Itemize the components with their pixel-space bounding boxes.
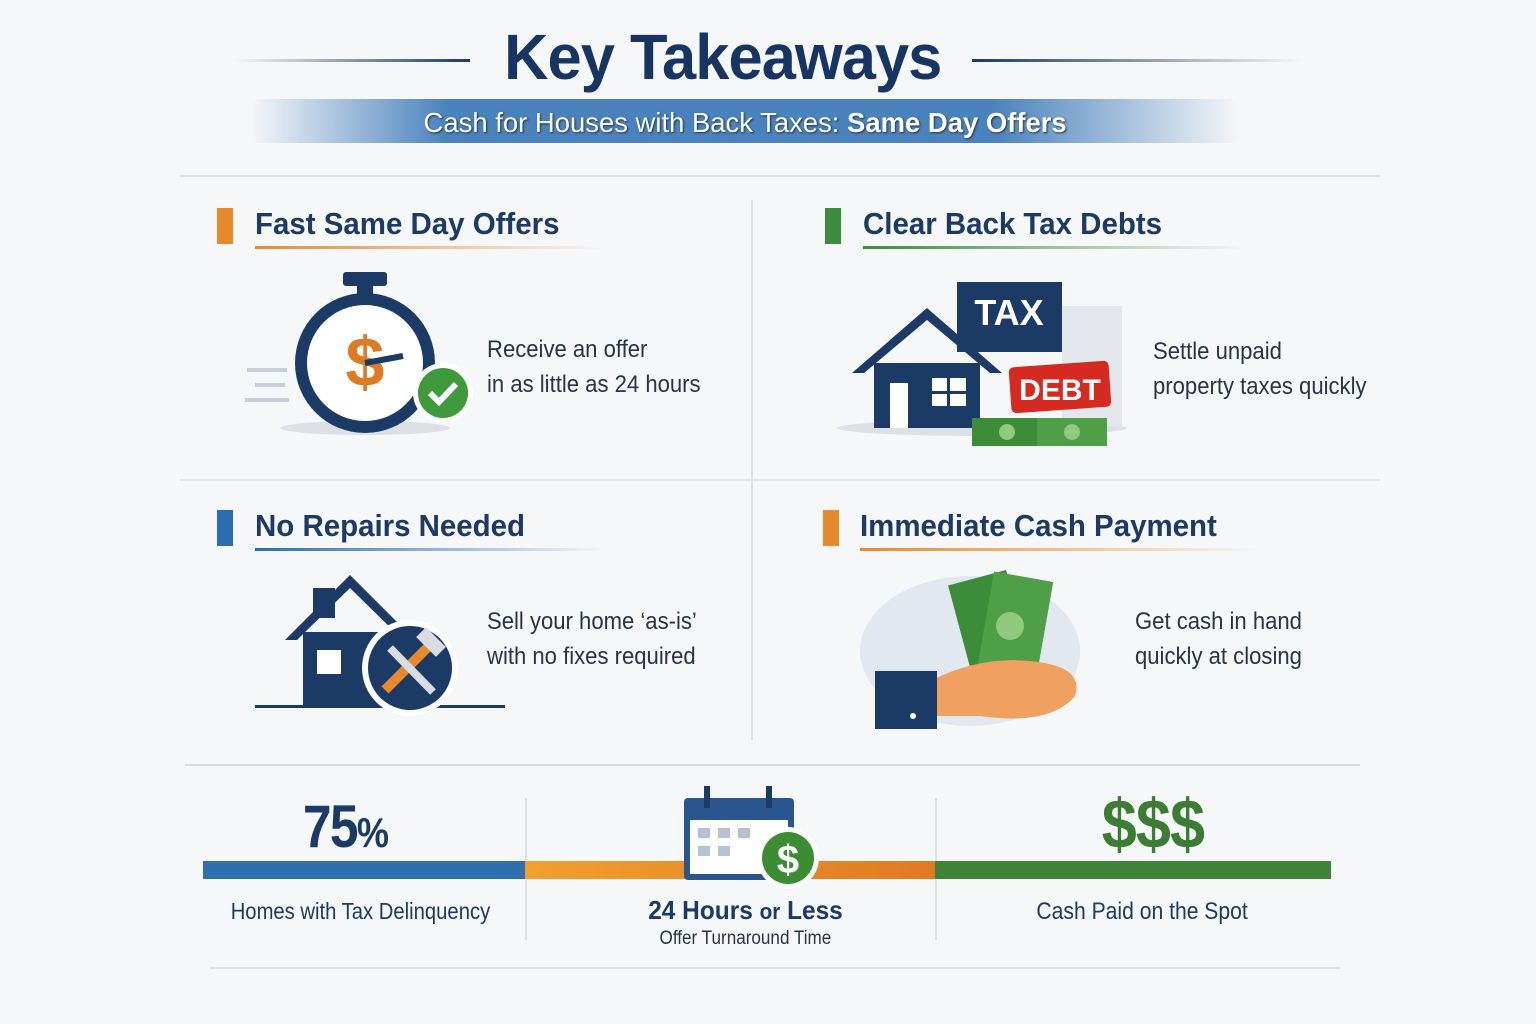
icon: calendar with dollar	[684, 786, 819, 889]
stat: 24 hours: Offer Turnaround Time	[659, 928, 831, 949]
title: Key Takeaways	[504, 21, 942, 93]
panel: clear back tax debts	[825, 206, 1367, 446]
stat: 75%	[231, 793, 490, 924]
text: settle unpaid taxes: property taxes quickly	[1153, 373, 1367, 400]
panel: no repairs needed	[217, 508, 697, 716]
stat: $$$: Cash Paid on the Spot	[1037, 898, 1248, 925]
heading: no repairs needed: No Repairs Needed	[255, 508, 525, 543]
icon: stopwatch	[245, 272, 473, 435]
stat: $$$	[1037, 785, 1248, 925]
heading: immediate cash payment	[823, 508, 1244, 551]
heading: clear back tax debts: Clear Back Tax Debts	[863, 206, 1162, 241]
stat: 75%: Homes with Tax Delinquency	[231, 898, 490, 924]
title	[244, 21, 1290, 93]
stat: 75%: 75%	[303, 793, 388, 860]
text: receive offer: in as little as 24 hours	[487, 371, 701, 398]
icon: house with tools	[255, 575, 505, 716]
subtitle banner	[250, 99, 1240, 143]
stat: 24 hours: 24 Hours or Less	[648, 895, 842, 925]
heading: immediate cash payment: Immediate Cash Payment	[860, 508, 1217, 543]
heading: fast same day offers	[217, 206, 591, 249]
panel: fast same day offers	[217, 206, 701, 435]
text: receive offer: Receive an offer	[487, 336, 647, 363]
icon: house with tax debt: DEBT	[1019, 374, 1101, 407]
text: settle unpaid taxes	[1153, 338, 1367, 400]
icon: house with tax debt: TAX	[974, 292, 1044, 333]
stat bar	[203, 861, 1331, 879]
icon: stopwatch: $	[346, 323, 384, 401]
text: sell as is	[487, 608, 697, 670]
icon: calendar with dollar: $	[777, 838, 799, 882]
text: receive offer	[487, 336, 701, 398]
text: get cash: quickly at closing	[1135, 643, 1302, 670]
panel: immediate cash payment	[823, 508, 1302, 729]
stat: $$$: $$$	[1101, 785, 1204, 863]
text: settle unpaid taxes: Settle unpaid	[1153, 338, 1282, 365]
text: get cash	[1135, 608, 1302, 670]
icon: hand with cash	[860, 570, 1080, 729]
text: sell as is: with no fixes required	[487, 643, 696, 670]
icon: house with tax debt	[837, 282, 1127, 446]
subtitle banner: Cash for Houses with Back Taxes: Same Day Offers	[423, 107, 1067, 138]
text: get cash: Get cash in hand	[1135, 608, 1302, 635]
heading: no repairs needed	[217, 508, 590, 551]
heading: fast same day offers: Fast Same Day Offers	[255, 206, 559, 241]
stat: 24 hours	[648, 895, 842, 949]
text: sell as is: Sell your home ‘as-is’	[487, 608, 697, 635]
heading: clear back tax debts	[825, 206, 1226, 249]
